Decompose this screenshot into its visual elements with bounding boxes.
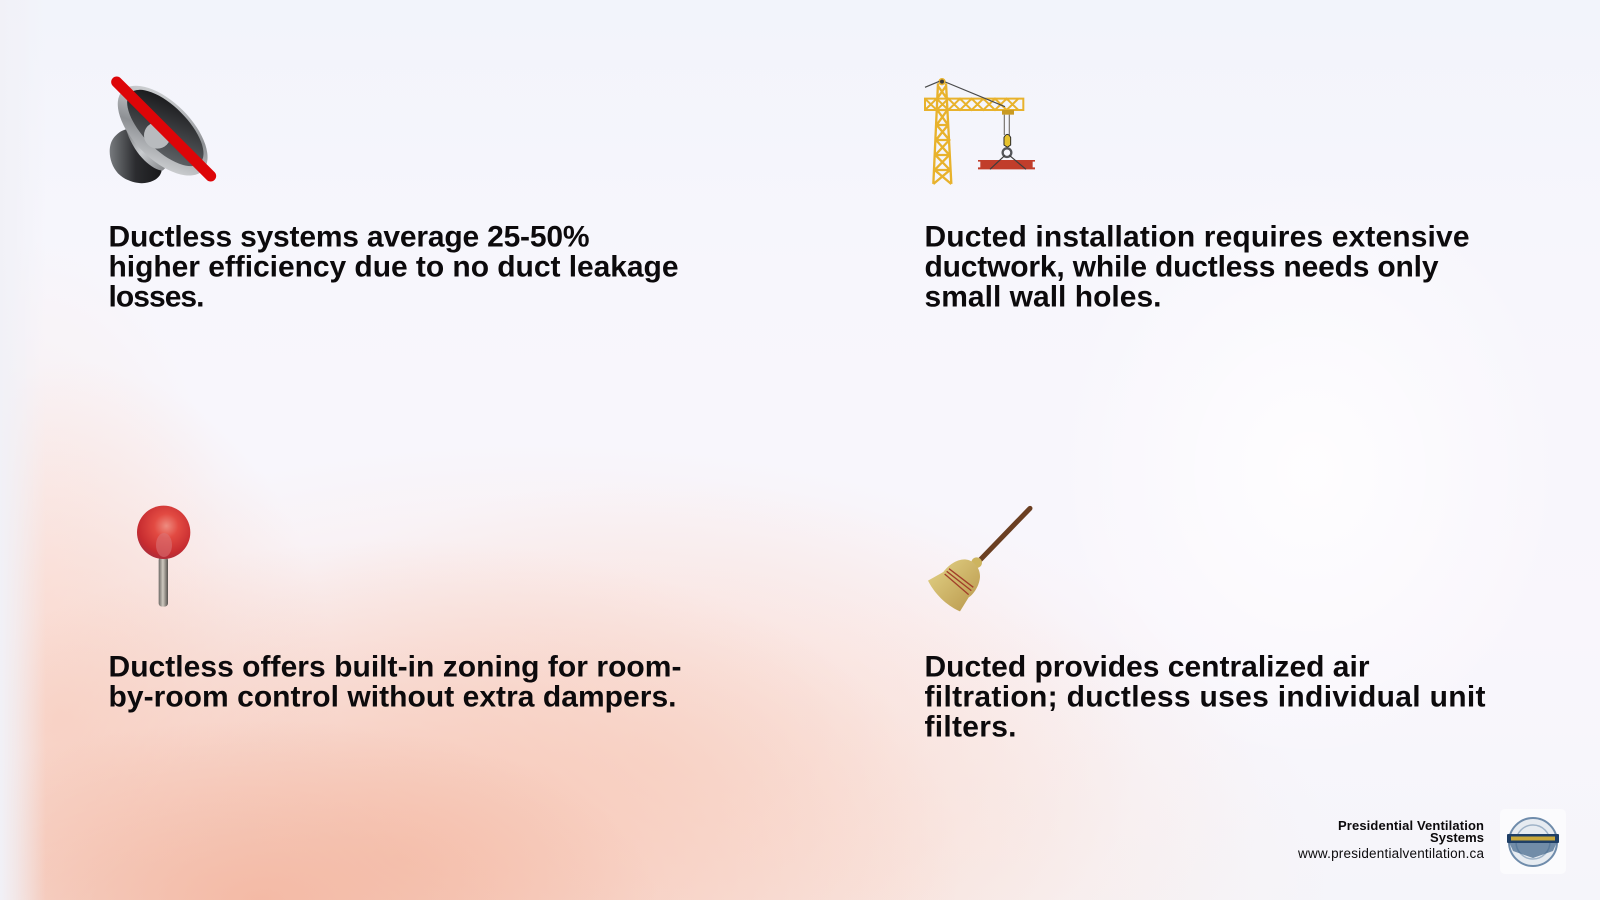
text: installation: ductwork, while ductless needs only bbox=[924, 250, 1439, 284]
footer brand bbox=[1297, 809, 1566, 874]
website: www.presidentialventilation.ca bbox=[1297, 846, 1484, 861]
brand name: Presidential Ventilation bbox=[1338, 818, 1484, 833]
text: efficiency: losses. bbox=[108, 280, 204, 314]
text: installation: Ducted installation requires extensive bbox=[924, 220, 1470, 254]
text: installation: small wall holes. bbox=[924, 280, 1162, 314]
icon: crane bbox=[925, 78, 1035, 184]
logo bbox=[1500, 809, 1566, 874]
panel: ducted installation bbox=[924, 78, 1470, 314]
text: filtration: filtration; ductless uses individual unit bbox=[924, 680, 1486, 714]
icon: round pushpin bbox=[137, 506, 190, 607]
panel: ductless efficiency bbox=[102, 70, 678, 314]
text: efficiency: higher efficiency due to no duct leakage bbox=[108, 250, 678, 284]
text: efficiency: Ductless systems average 25-50% bbox=[108, 220, 590, 254]
panel: ducted filtration bbox=[924, 508, 1486, 744]
text: zoning: Ductless offers built-in zoning for room- bbox=[108, 650, 682, 684]
icon: muted speaker bbox=[102, 70, 223, 191]
text: zoning: by-room control without extra dampers. bbox=[108, 680, 676, 714]
brand name: Systems bbox=[1430, 830, 1484, 845]
text: filtration: filters. bbox=[924, 710, 1016, 744]
text: filtration: Ducted provides centralized air bbox=[924, 650, 1370, 684]
panel: ductless zoning bbox=[108, 506, 682, 714]
icon: broom bbox=[928, 508, 1030, 611]
